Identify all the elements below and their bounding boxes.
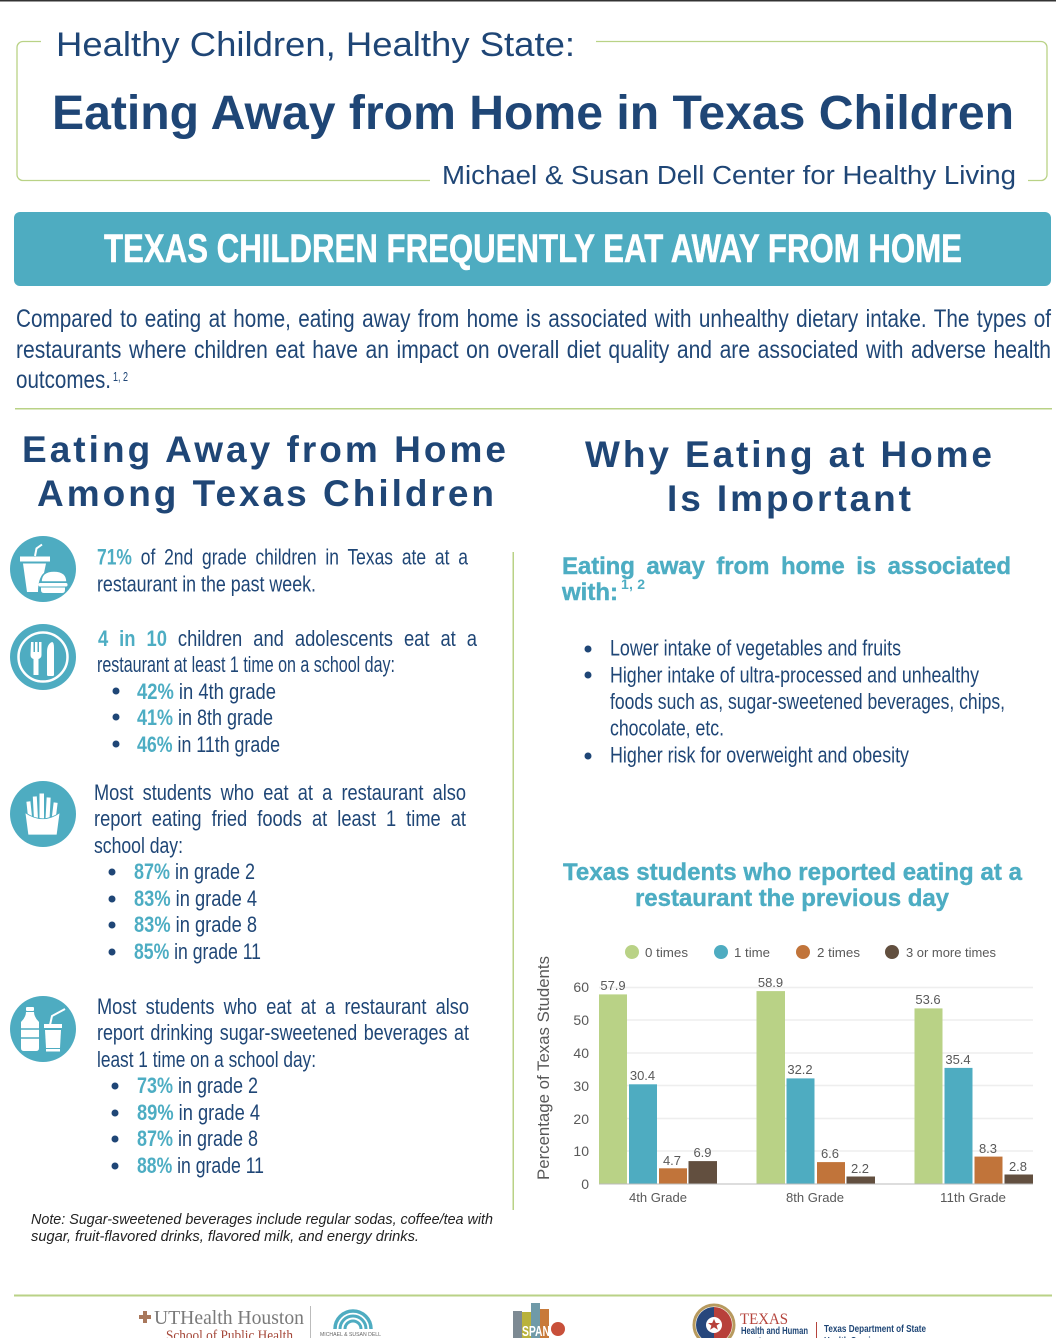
bars: 4th grade: 57.9 <box>600 978 626 993</box>
text: sugar-sweetened beverages: Most students who eat at a restaurant also <box>97 994 469 1019</box>
bars: 11th grade: 8.3 <box>979 1141 997 1156</box>
y axis: 60 <box>573 979 589 995</box>
title block <box>17 26 1047 190</box>
bars: 8th grade: 8th Grade <box>786 1190 844 1205</box>
logo: UTHealth Houston: UTHealth Houston <box>154 1307 304 1329</box>
text: fried foods <box>94 780 466 964</box>
logo: Michael & Susan Dell: MICHAEL & SUSAN DELL <box>320 1332 381 1338</box>
subheading: associated with <box>561 553 1011 606</box>
icon: plate with fork and knife <box>10 624 76 690</box>
y axis: 40 <box>573 1045 589 1061</box>
icon: drink and burger <box>10 536 76 602</box>
chart legend: 0 times <box>645 945 689 960</box>
bars: 4th grade: 30.4 <box>630 1068 655 1083</box>
chart legend <box>625 945 996 960</box>
bars: 11th grade: 53.6 <box>915 992 941 1007</box>
text: 4 in 10: 46% in 11th grade <box>137 732 280 757</box>
intro paragraph: outcomes. <box>16 366 111 394</box>
y axis: 30 <box>573 1078 589 1094</box>
heading: left column: Eating Away from Home <box>22 429 506 470</box>
note <box>31 1212 493 1245</box>
text: fried foods: 83% in grade 8 <box>134 912 257 937</box>
text: fried foods: school day: <box>94 833 183 858</box>
banner <box>14 212 1051 286</box>
bars: 11th grade: 35.4 <box>945 1052 971 1067</box>
text: 4 in 10: 42% in 4th grade <box>137 679 276 704</box>
bars: 8th grade: 32.2 <box>787 1062 813 1077</box>
bars: 4th grade <box>599 978 717 1205</box>
intro paragraph: 1, 2 <box>113 369 128 384</box>
chart title: Texas students who reported eating at a <box>563 859 1023 886</box>
text: fried foods: 83% in grade 4 <box>134 886 257 911</box>
logo: Texas Health and Human Services: Health and Human <box>741 1326 808 1337</box>
title: kicker: Healthy Children, Healthy State: <box>56 26 575 64</box>
bars: 11th grade <box>914 992 1033 1205</box>
chart title: restaurant the previous day <box>635 885 950 912</box>
title: organization: Michael & Susan Dell Center for Healthy Living <box>442 162 1016 190</box>
chart legend: 1 time <box>734 945 770 960</box>
logo: Michael & Susan Dell <box>320 1311 381 1338</box>
y axis: 20 <box>573 1111 589 1127</box>
text: 71 percent: 71% of 2nd grade children in Texas ate at a <box>97 544 469 570</box>
bars: 11th grade: 2.8 <box>1009 1159 1027 1174</box>
icon: french fries <box>10 781 76 847</box>
text: sugar-sweetened beverages <box>97 994 469 1178</box>
text: fried foods: report eating fried foods at least 1 time at <box>94 806 466 831</box>
bars: 8th grade: 2.2 <box>851 1161 869 1176</box>
y axis <box>534 956 589 1192</box>
bar chart <box>534 945 1033 1205</box>
intro paragraph <box>16 305 1051 394</box>
logo: Texas Health and Human Services <box>694 1305 926 1338</box>
text: sugar-sweetened beverages: 87% in grade 8 <box>137 1126 258 1151</box>
text: 71 percent: restaurant in the past week. <box>97 572 316 596</box>
y axis: Percentage of Texas Students <box>534 956 553 1180</box>
text: sugar-sweetened beverages: 89% in grade 4 <box>137 1100 260 1125</box>
bars: 8th grade: 58.9 <box>758 975 783 990</box>
icon: bottle and cup <box>10 996 76 1062</box>
y axis: 50 <box>573 1012 589 1028</box>
y axis: 10 <box>573 1143 589 1159</box>
bars: 4th grade: 4th Grade <box>629 1190 687 1205</box>
heading: left column: Among Texas Children <box>37 473 494 514</box>
text: 4 in 10: restaurant at least 1 time on a school day: <box>97 652 395 677</box>
heading: right column: Is Important <box>667 478 911 519</box>
text: 4 in 10: 4 in 10 children and adolescents eat at a <box>98 626 478 651</box>
text: sugar-sweetened beverages: 73% in grade 2 <box>137 1073 258 1098</box>
bullet list: health associations: chocolate, etc. <box>610 716 724 740</box>
bullet list: health associations: Higher intake of ultra-processed and unhealthy <box>610 662 979 688</box>
text: fried foods: Most students who eat at a restaurant also <box>94 780 466 805</box>
bars: 8th grade <box>756 975 875 1205</box>
chart legend: 2 times <box>817 945 861 960</box>
bars: 4th grade: 4.7 <box>663 1153 681 1168</box>
bullet list: health associations: Higher risk for overweight and obesity <box>610 742 909 768</box>
bars: 4th grade: 6.9 <box>693 1145 712 1160</box>
note: Note: Sugar-sweetened beverages include regular sodas, coffee/tea with <box>31 1212 493 1228</box>
chart legend: 3 or more times <box>906 945 996 960</box>
heading: left column <box>22 429 506 514</box>
chart title <box>563 859 1023 912</box>
y axis: 0 <box>581 1176 589 1192</box>
bullet list: health associations: Lower intake of vegetables and fruits <box>610 636 901 660</box>
text: 4 in 10: 41% in 8th grade <box>137 705 273 730</box>
heading: right column: Why Eating at Home <box>585 434 992 475</box>
text: fried foods: 87% in grade 2 <box>134 859 255 884</box>
text: 71 percent <box>97 544 469 596</box>
title: main heading: Eating Away from Home in Texas Children <box>52 87 1014 140</box>
heading: right column <box>585 434 992 519</box>
bullet list: health associations <box>584 636 1005 768</box>
text: sugar-sweetened beverages: 88% in grade 11 <box>137 1153 264 1178</box>
text: 4 in 10 <box>97 626 478 757</box>
subheading: associated with: Eating away from home is associated <box>562 553 1011 580</box>
bars: 8th grade: 6.6 <box>821 1146 839 1161</box>
logo: UTHealth Houston <box>139 1306 311 1338</box>
subheading: associated with: with: <box>561 579 618 606</box>
note: sugar, fruit-flavored drinks, flavored milk, and energy drinks. <box>31 1229 419 1245</box>
bars: 11th grade: 11th Grade <box>940 1190 1006 1205</box>
text: sugar-sweetened beverages: least 1 time on a school day: <box>97 1047 316 1072</box>
logo: SPAN <box>513 1303 565 1338</box>
text: sugar-sweetened beverages: report drinking sugar-sweetened beverages at <box>97 1020 469 1045</box>
logo: Texas Health and Human Services: TEXAS <box>740 1311 788 1328</box>
logo: Texas Health and Human Services: Texas Department of State <box>824 1324 926 1335</box>
text: fried foods: 85% in grade 11 <box>134 939 261 964</box>
subheading: associated with: 1, 2 <box>621 576 645 592</box>
